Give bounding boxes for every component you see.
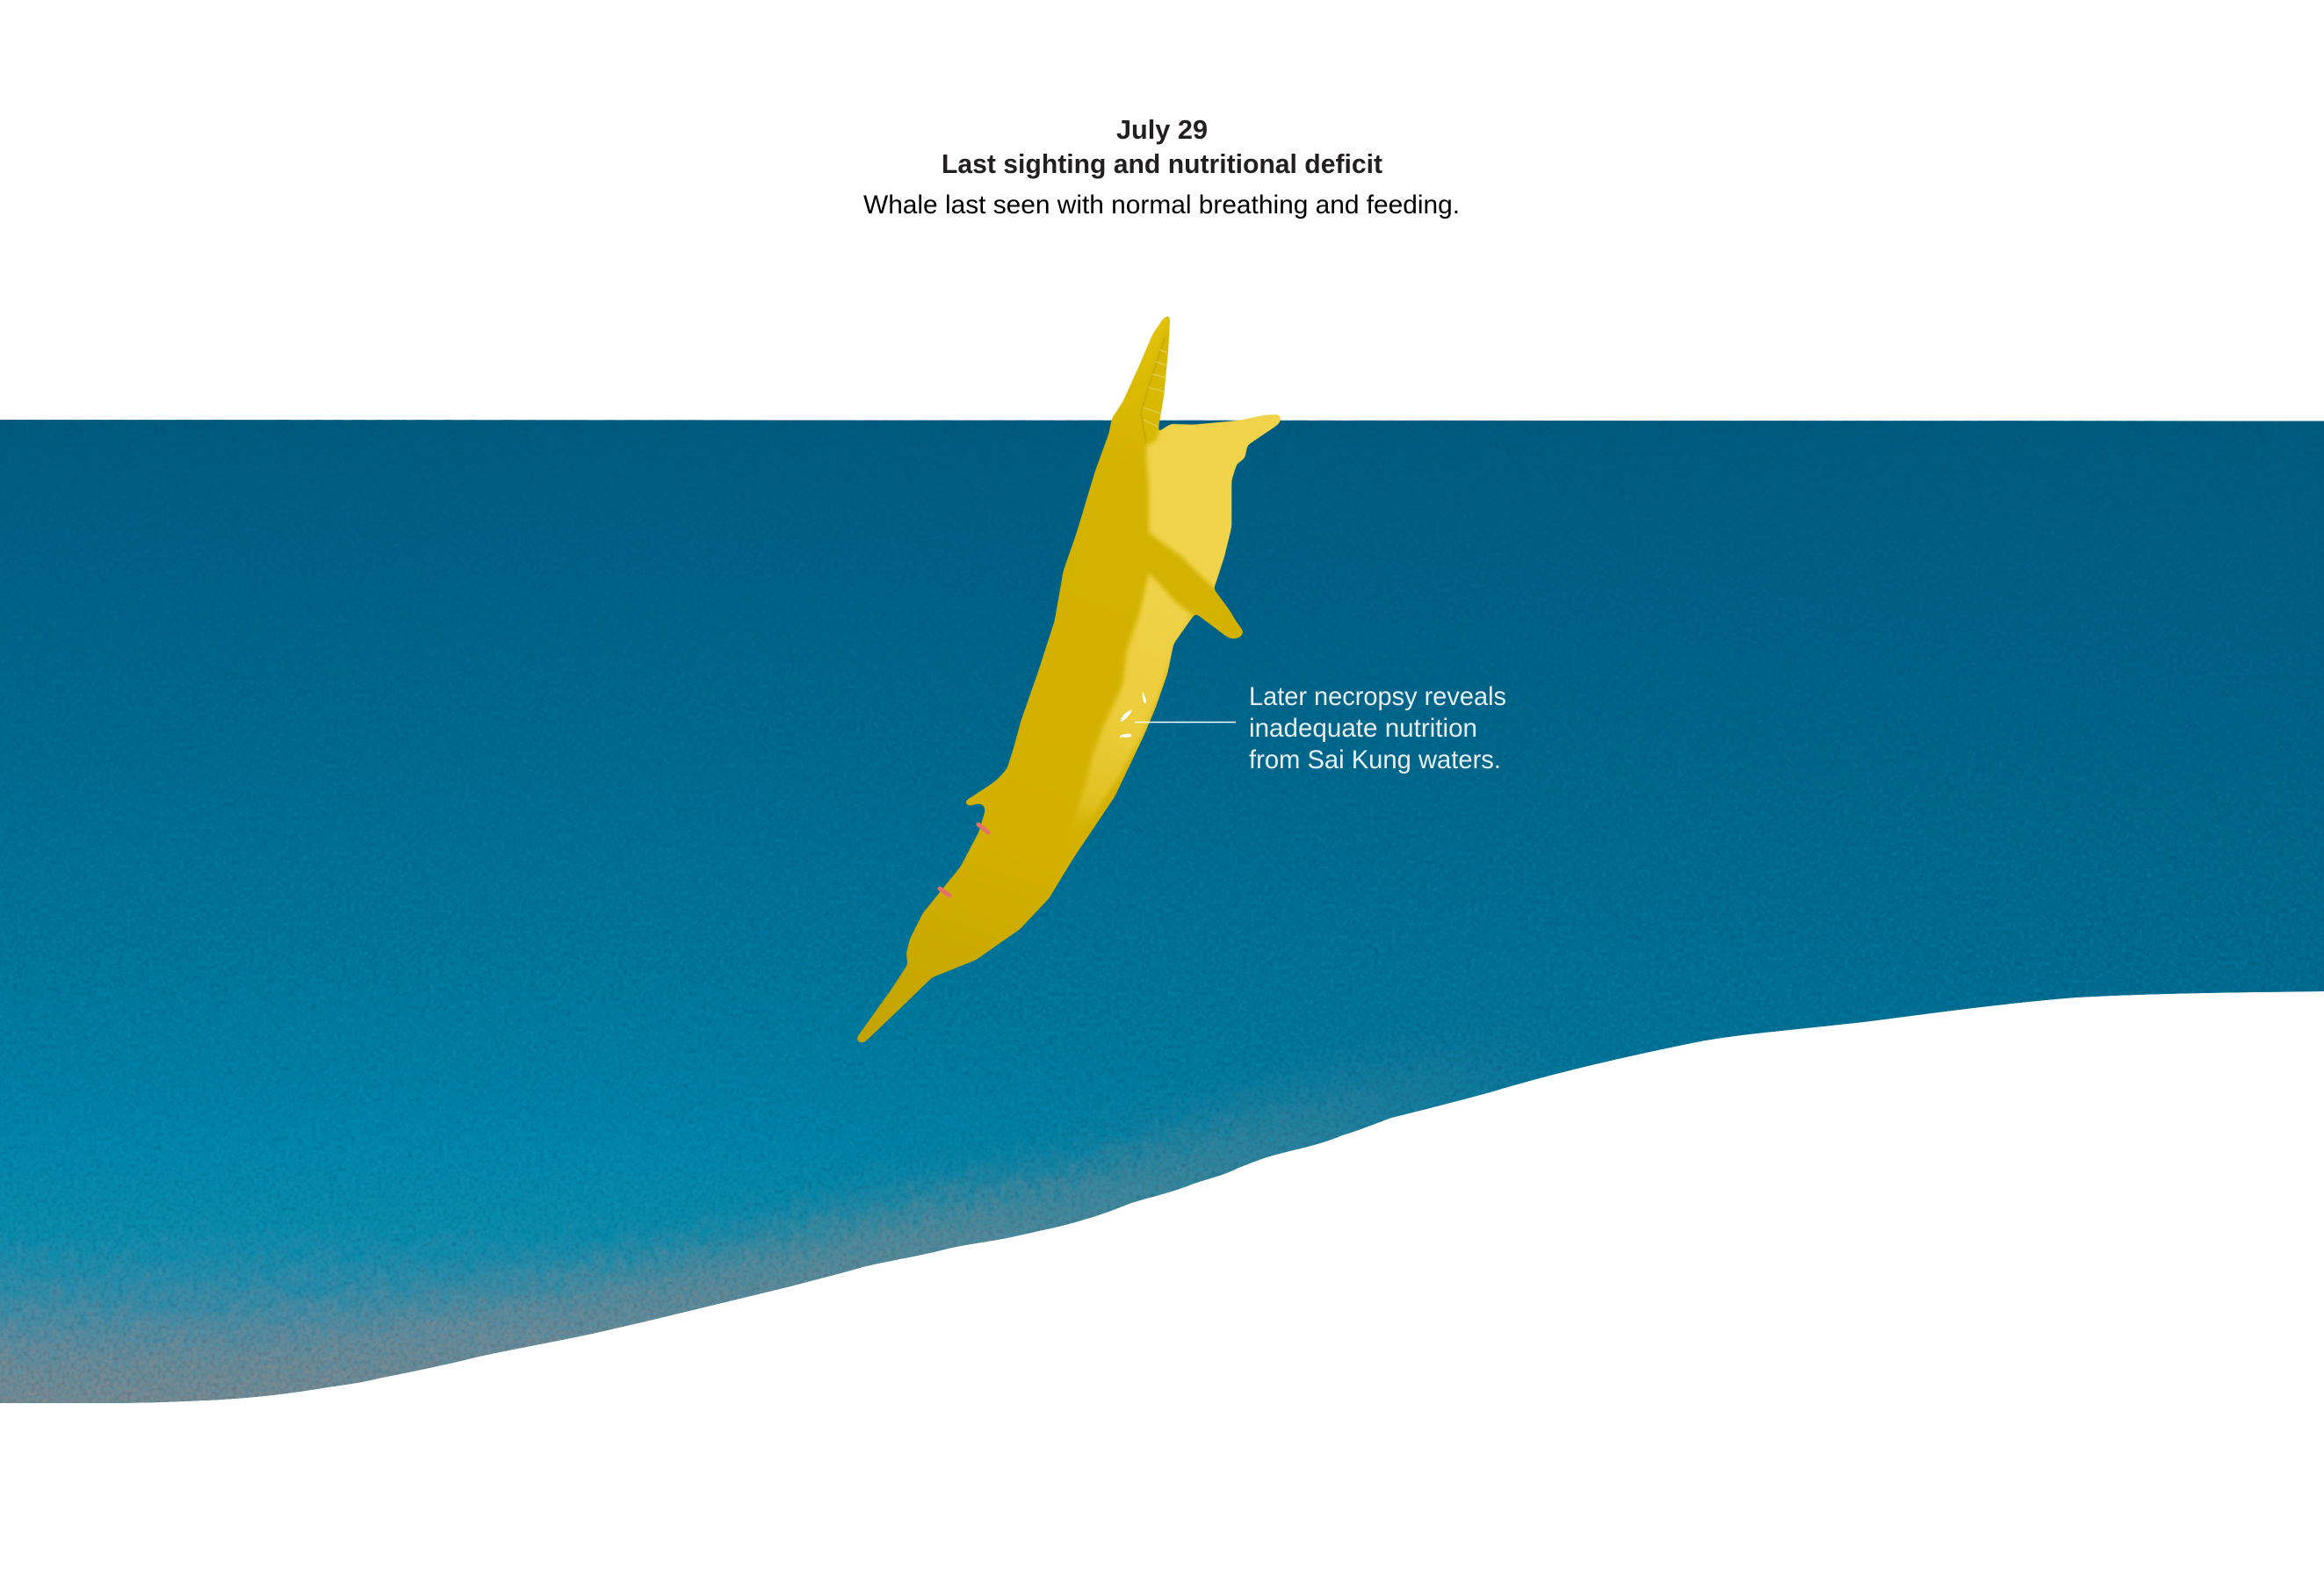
fish 2: [1121, 709, 1132, 722]
callout text: [1249, 682, 1506, 774]
red injury mark lower: [940, 889, 949, 896]
whale pale belly: [1072, 572, 1193, 841]
leader line: [1135, 722, 1236, 724]
whale far fluke: [1138, 315, 1170, 445]
whale main body: [856, 314, 1244, 1043]
callout: necropsy note: [1135, 682, 1506, 774]
callout text: Later necropsy reveals: [1249, 682, 1506, 711]
title heading: Last sighting and nutritional deficit: [942, 148, 1382, 179]
callout text: from Sai Kung waters.: [1249, 745, 1501, 774]
eaten fish in belly: [1120, 692, 1146, 738]
fluke ridge shadow: [1141, 338, 1165, 443]
whale silhouette: [856, 314, 1281, 1043]
subtitle text: Whale last seen with normal breathing and feeding.: [863, 191, 1460, 220]
red injury mark upper: [978, 824, 988, 832]
date heading: July 29: [1116, 114, 1208, 145]
whale illustration: [856, 314, 1281, 1043]
callout text: inadequate nutrition: [1249, 714, 1477, 743]
ocean cross-section with seabed edge: [0, 420, 2324, 1403]
fluke stripes: [1143, 349, 1167, 427]
heading block: [863, 114, 1460, 220]
fish 1: [1143, 692, 1146, 703]
fish 3: [1120, 734, 1131, 738]
whale pale back: [1142, 414, 1281, 597]
